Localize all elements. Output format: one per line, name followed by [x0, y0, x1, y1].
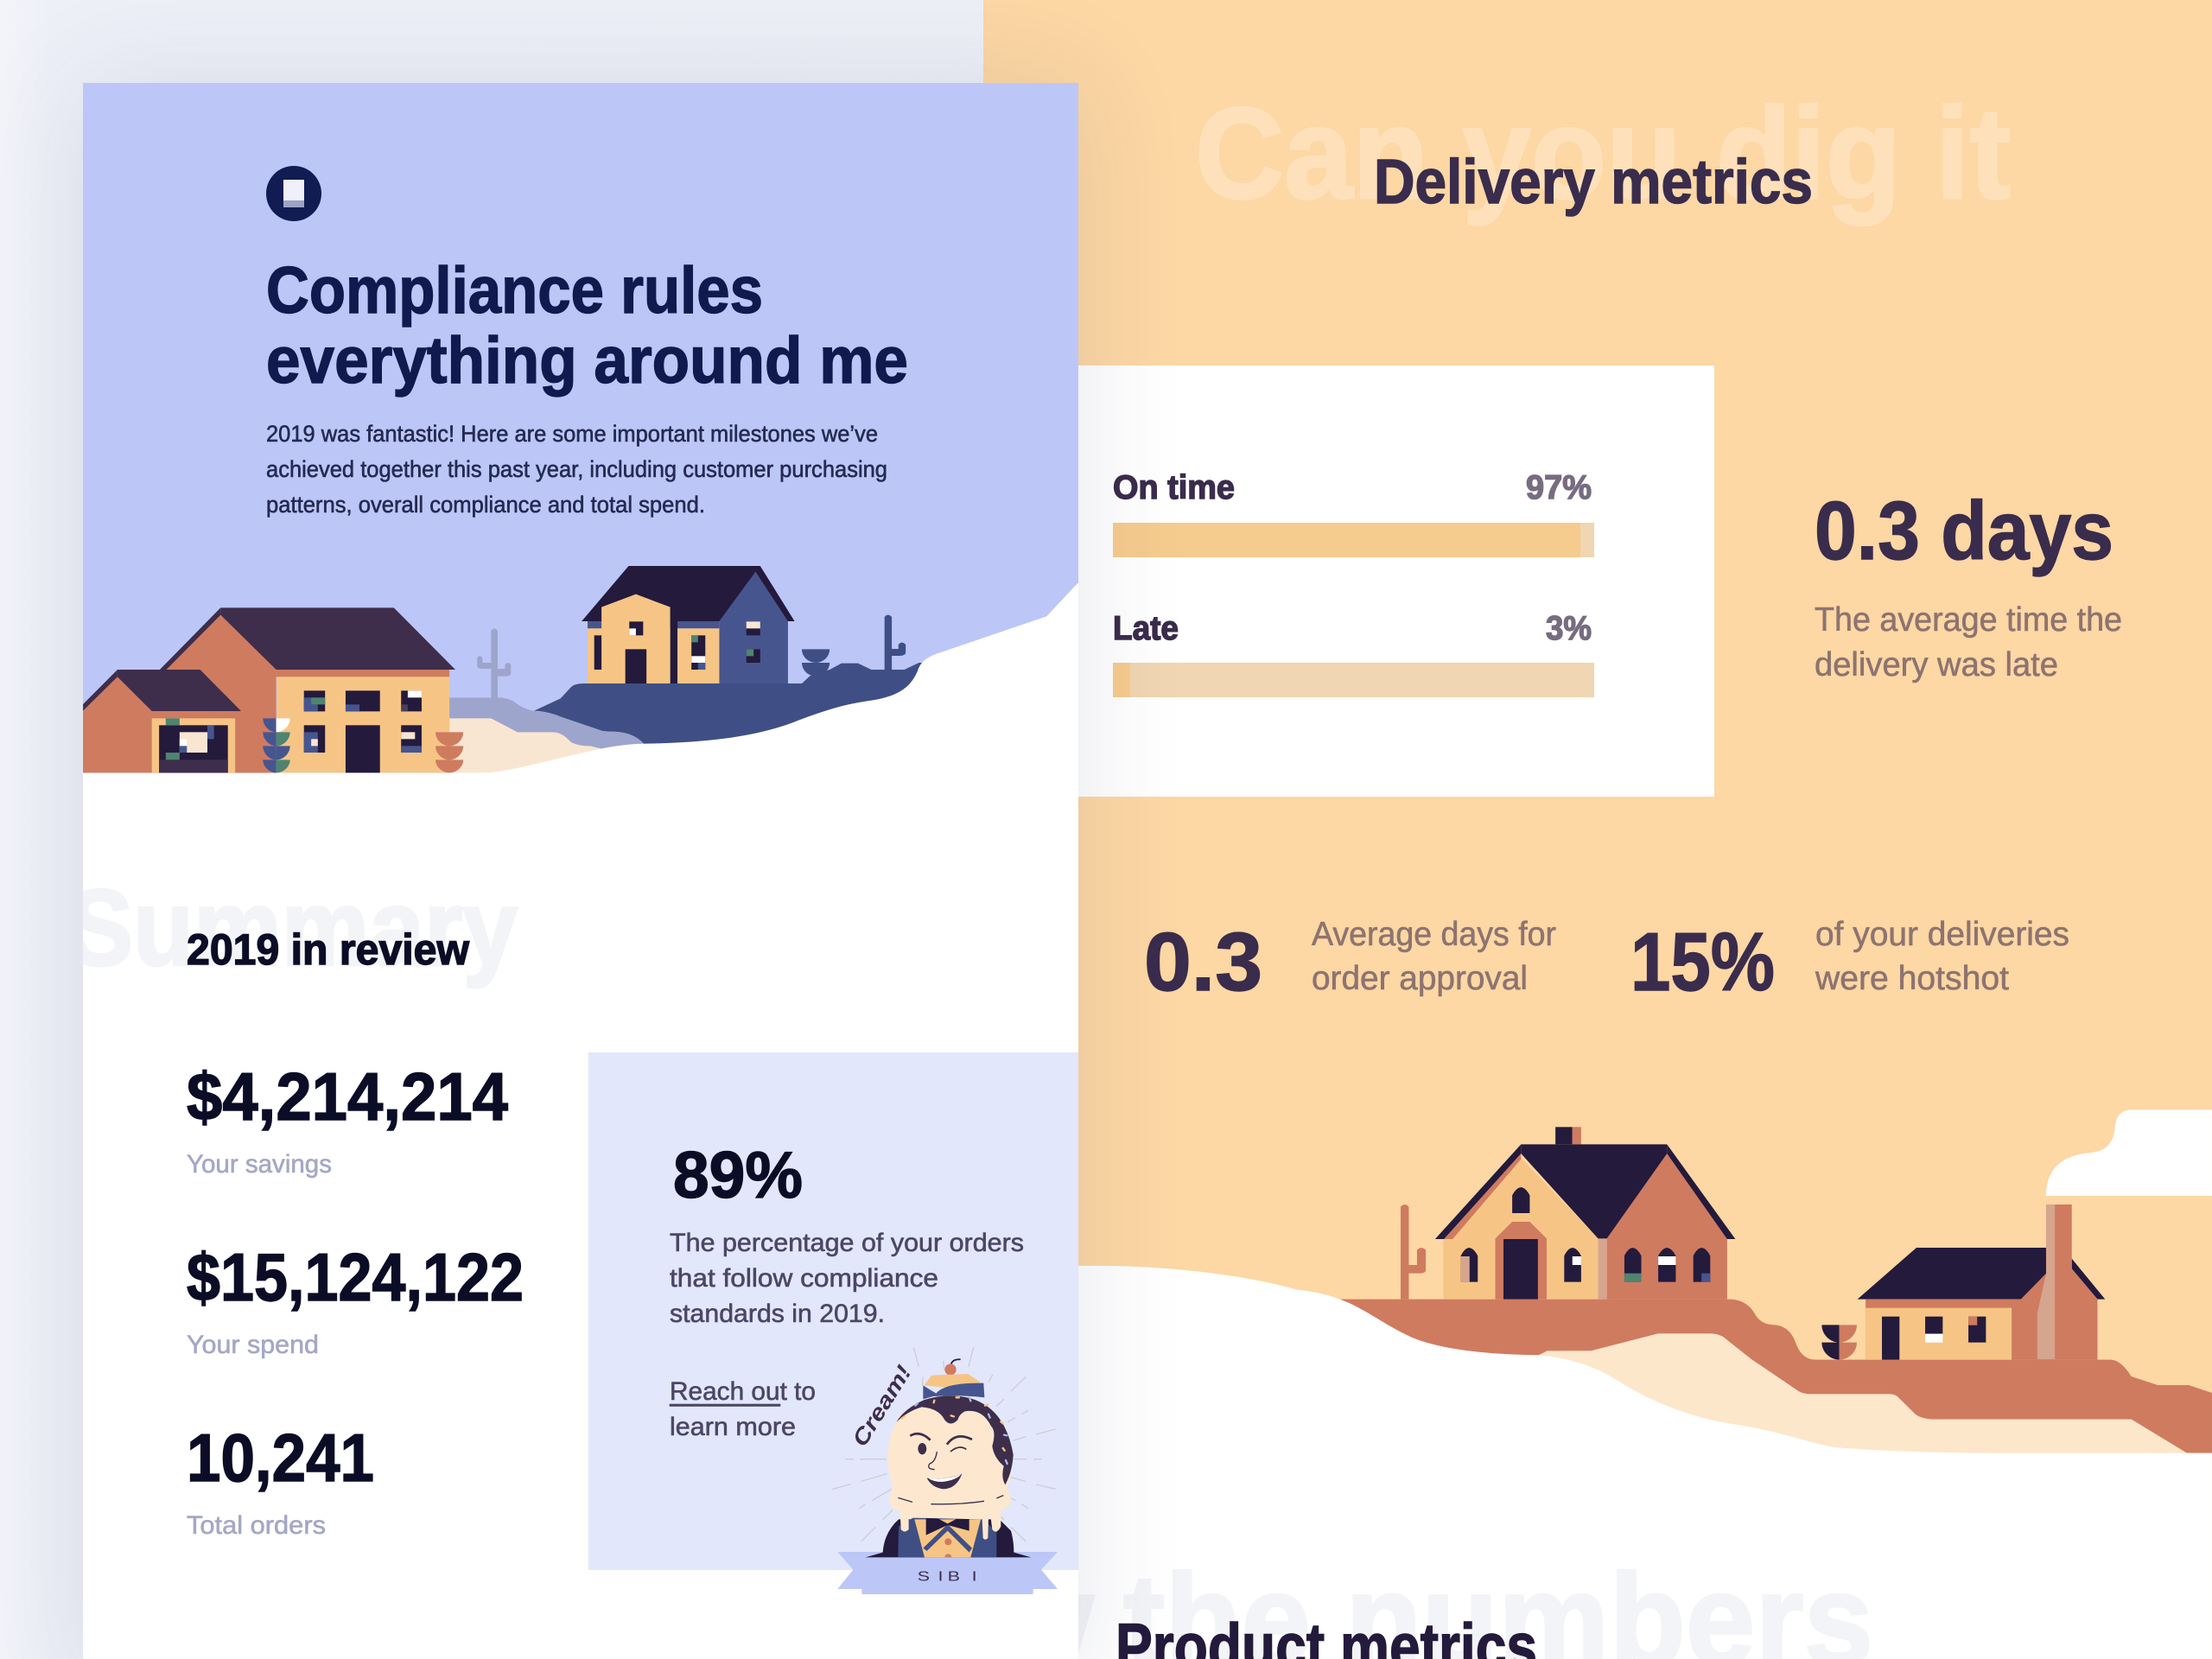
plant pots: blue and green: [263, 718, 290, 772]
value: 3%: 3%: [1546, 610, 1592, 647]
illustration: houses on blue hill: [71, 566, 1084, 789]
intro paragraph: [266, 421, 887, 518]
value: 97%: 97%: [1526, 469, 1592, 506]
lettering: cream: Cream!: [848, 1361, 917, 1451]
panel: summary card: [83, 83, 1078, 1659]
caption: order approval: order approval: [1312, 960, 1528, 997]
bar: late: [1113, 663, 1594, 697]
stat: spend: Your spend: [187, 1331, 319, 1359]
house: gabled cottage: [1435, 1127, 1735, 1300]
intro paragraph: patterns, overall compliance and total spend.: [266, 492, 705, 518]
link: reach out: Reach out to: [670, 1377, 816, 1406]
caption: average time late: The average time the: [1815, 601, 2122, 639]
stat: spend: [187, 1239, 524, 1359]
buttons: [944, 1538, 951, 1557]
ribbon: [837, 1552, 1058, 1594]
sand hill: [449, 718, 607, 775]
caption: hotshot deliveries: of your deliveries: [1815, 916, 2069, 953]
bar: on time: [1113, 523, 1594, 557]
stat: savings: $4,214,214: [187, 1058, 508, 1135]
vest: [898, 1518, 996, 1557]
caption: hotshot deliveries: were hotshot: [1815, 960, 2009, 997]
house: chimney cottage: [1858, 1205, 2105, 1360]
stat: savings: Your savings: [187, 1150, 332, 1179]
chocolate topping: [896, 1395, 1014, 1484]
stat: 0.3: 0.3: [1144, 916, 1262, 1008]
stat: spend: $15,124,122: [187, 1239, 524, 1315]
snow curve: [71, 583, 1084, 789]
bow tie: [926, 1512, 969, 1535]
callout panel: compliance: [588, 1052, 1078, 1594]
caption: average time late: delivery was late: [1815, 646, 2058, 683]
section heading: 2019 in review: 2019 in review: [187, 925, 469, 974]
house: small garage: [83, 670, 276, 772]
stat: orders: [187, 1420, 374, 1540]
blue pots: [802, 649, 830, 677]
intro paragraph: 2019 was fantastic! Here are some important milestones we’ve: [266, 421, 878, 447]
illustration: houses on terracotta hill: [1078, 1109, 2212, 1659]
label: late: Late: [1113, 610, 1179, 647]
caption: hotshot deliveries: [1815, 916, 2069, 997]
terracotta ground: [1332, 1300, 2212, 1453]
foreground cactus: [885, 615, 906, 670]
rays: [832, 1347, 1056, 1541]
house: large terracotta house: [152, 607, 455, 772]
stat: orders: 10,241: [187, 1420, 374, 1496]
intro paragraph: achieved together this past year, including customer purchasing: [266, 456, 887, 482]
panel: delivery metrics: [983, 0, 2212, 1659]
stat: 15%: 15%: [1630, 916, 1775, 1008]
plant pots: [1821, 1325, 1857, 1360]
stat: savings: [187, 1058, 508, 1179]
icon: logo: [266, 166, 321, 221]
sprinkles: [901, 1397, 1007, 1464]
caption: order approval: Average days for: [1312, 916, 1556, 953]
illustration: sibi ice cream mascot: [832, 1347, 1058, 1594]
cactus: [1401, 1205, 1426, 1300]
stat: 0.3 days: 0.3 days: [1815, 485, 2113, 577]
heading: delivery metrics: Delivery metrics: [1374, 148, 1813, 217]
link: reach out: learn more: [670, 1413, 796, 1441]
link: reach out: [670, 1377, 816, 1441]
label: on time: On time: [1113, 469, 1235, 506]
cake hat: [923, 1359, 984, 1399]
white snow curve: [1078, 1266, 2212, 1659]
shirt: [914, 1519, 981, 1557]
plant pots: terracotta: [435, 732, 463, 772]
callout text: The percentage of your orders: [670, 1229, 1024, 1257]
ribbon: SIBI: [918, 1569, 977, 1585]
hero background: [83, 83, 1078, 774]
caption: average time late: [1815, 601, 2122, 683]
title: Compliance rules: [266, 254, 763, 327]
title: [266, 254, 908, 397]
stat: 89%: 89%: [673, 1139, 803, 1212]
callout text: that follow compliance: [670, 1264, 938, 1293]
cloud: [2046, 1109, 2212, 1196]
coat: [866, 1519, 1031, 1557]
pale hill: [449, 697, 646, 760]
stat: orders: Total orders: [187, 1511, 326, 1540]
caption: order approval: [1312, 916, 1556, 997]
title: everything around me: [266, 324, 908, 397]
callout text: standards in 2019.: [670, 1300, 885, 1328]
head: [887, 1402, 1013, 1540]
background cactus: [477, 628, 511, 698]
house: blue gabled house: [582, 566, 795, 683]
blue hill: [534, 663, 938, 754]
callout text: [670, 1229, 1024, 1328]
face: [898, 1433, 1003, 1504]
sand path: [1539, 1333, 2187, 1453]
ghost heading: can you dig it: Can you dig it: [1195, 80, 2011, 226]
white metrics card: [1078, 365, 1714, 797]
